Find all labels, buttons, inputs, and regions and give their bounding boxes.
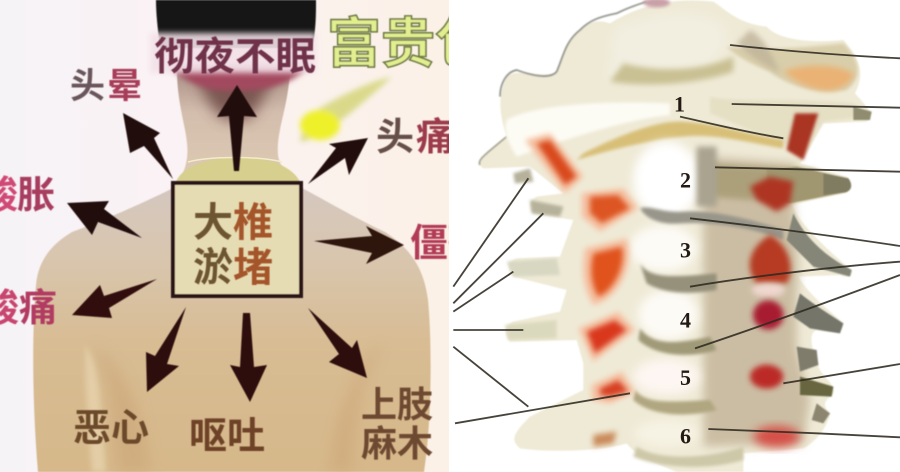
label: headache: 痛 (416, 117, 454, 159)
arrow: to stiffness (314, 226, 404, 264)
label: dizziness (70, 67, 141, 102)
arrow: to dizziness (123, 113, 173, 179)
left arteries in orange (525, 133, 638, 447)
head lower shadow (170, 66, 308, 91)
box: dazhui blockage (173, 183, 301, 296)
heading: rich bump label: 富贵包 (327, 14, 489, 74)
label: soreness swelling (0, 175, 55, 217)
vertebra numbers: 1 (674, 92, 685, 117)
hair (156, 0, 316, 48)
vertebra numbers: 3 (680, 237, 691, 262)
arrow: to headache (308, 138, 368, 184)
right arteries in red (750, 113, 818, 447)
vertebra numbers (674, 92, 691, 448)
label: headache: 头 (376, 117, 414, 159)
arrow: to nausea (146, 307, 186, 392)
panel: cervical spine anatomy (450, 0, 900, 472)
label: nausea: 恶心 (73, 408, 149, 450)
panel: back symptoms (0, 0, 489, 472)
vertebrae silhouette (479, 0, 870, 472)
intervertebral discs (633, 208, 783, 467)
leader lines (453, 45, 900, 437)
label: headache (377, 116, 449, 154)
panel background (450, 0, 900, 472)
panel background (0, 0, 450, 472)
marker: yellow highlight stroke (300, 77, 392, 142)
vertebra numbers: 4 (680, 307, 691, 332)
top sliver (643, 0, 670, 7)
vertebra highlights (630, 142, 717, 447)
groove: C1 yellow band (577, 122, 783, 160)
label: numb upper limbs: 麻木 (361, 423, 433, 464)
arrow: to soreness swelling (67, 201, 142, 238)
label: soreness pain (0, 288, 57, 330)
label: numb upper limbs: 上肢 (361, 384, 433, 425)
label: numb upper limbs (361, 384, 433, 464)
left transverse processes (505, 168, 563, 340)
arrow: to vomiting (230, 313, 267, 402)
label: dizziness: 晕 (107, 67, 142, 106)
label: vomiting: 呕吐 (189, 416, 265, 458)
vertebra numbers: 5 (680, 365, 691, 390)
label: soreness pain: 痛 (19, 288, 57, 330)
arrow: to numb limbs (308, 308, 367, 378)
arrow: to soreness pain (72, 279, 157, 318)
heading: insomnia label: 彻夜不眠 (154, 36, 316, 79)
bone mid-tone shading (703, 157, 817, 447)
box: dazhui blockage: 大椎 (193, 201, 273, 245)
label: dizziness: 头 (70, 67, 105, 106)
box: dazhui blockage: 淤堵 (193, 246, 273, 290)
vertebra numbers: 2 (680, 167, 691, 192)
back and shoulders figure (33, 70, 431, 472)
arrow: to insomnia (217, 85, 257, 171)
label: stiffness: 僵硬 (410, 223, 486, 265)
label: soreness swelling: 胀 (17, 175, 55, 217)
vertebra numbers: 6 (680, 423, 691, 448)
right spinous processes (767, 107, 872, 423)
